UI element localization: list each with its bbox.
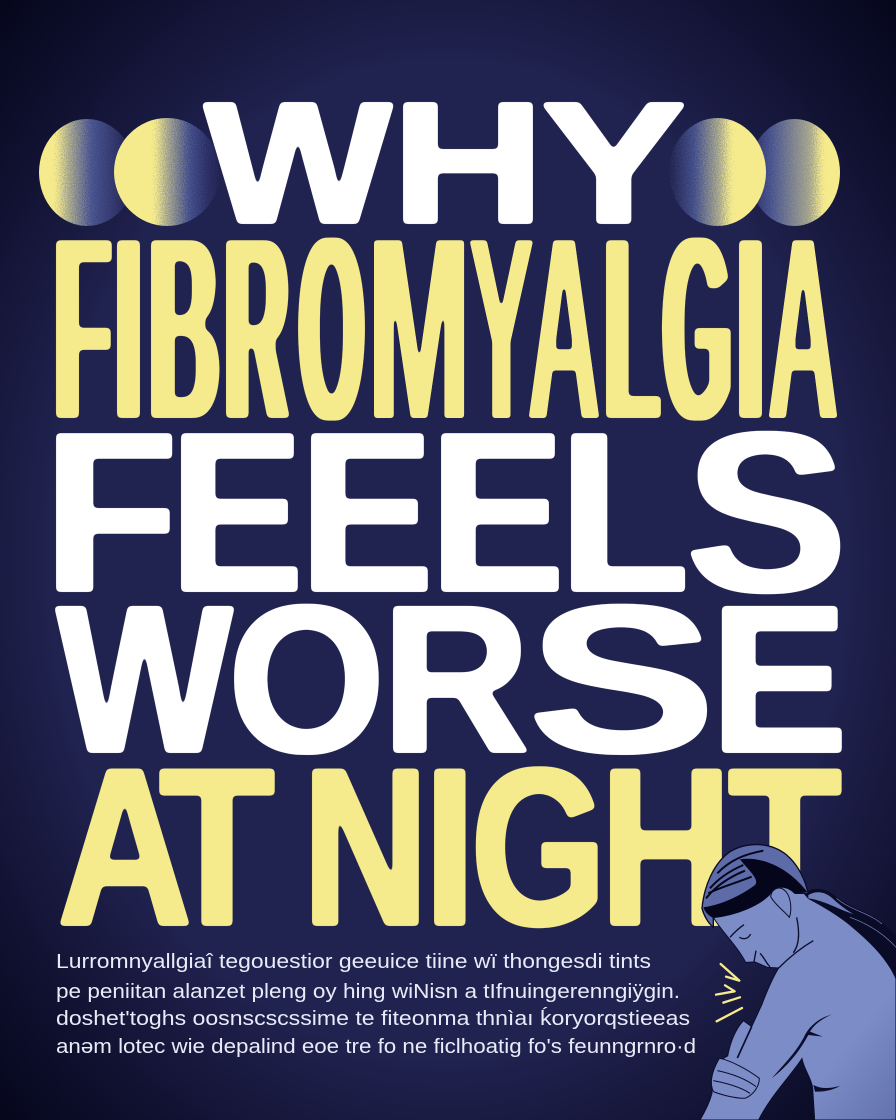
face details (730, 917, 813, 968)
title line: AT NIGHT (57, 720, 842, 974)
title line: WORSE: R (381, 562, 530, 797)
title line: FIBROMYALGIA (55, 177, 839, 480)
title line: FIBROMYALGIA: I (116, 178, 141, 480)
title line: WHY: H (391, 67, 545, 259)
title line: FIBROMYALGIA: L (605, 177, 659, 480)
title line: WORSE: E (710, 562, 848, 797)
moon phases right (669, 118, 840, 226)
title line: FIBROMYALGIA: G (663, 177, 731, 480)
body silhouette (700, 880, 896, 1120)
title line: FEEELS: F (44, 383, 177, 641)
title line: AT NIGHT: H (600, 721, 732, 973)
title line: FIBROMYALGIA: Y (468, 179, 535, 480)
title line: WHY: Y (541, 67, 686, 259)
title line: FIBROMYALGIA: M (368, 179, 470, 480)
title line: FIBROMYALGIA: A (527, 179, 601, 480)
ponytail highlights (808, 892, 853, 914)
pain spark marks (716, 964, 742, 1021)
illustration: woman in pain (700, 845, 896, 1120)
moon phases left (39, 118, 219, 226)
title line: WORSE (56, 561, 848, 798)
title line: AT NIGHT: N (302, 720, 429, 973)
title line: AT NIGHT: T (159, 721, 275, 974)
title line: AT NIGHT: A (57, 722, 192, 974)
title line: FEEELS (44, 382, 847, 642)
title line: FIBROMYALGIA: B (150, 178, 219, 479)
body paragraph: anəm lotec wie depalind eoe tre fo ne ficlhoatig fo's feunngrnro·d (56, 1036, 696, 1058)
title line: FEEELS: E (301, 382, 433, 641)
title line: FEEELS: L (560, 383, 689, 641)
title line: WORSE: S (527, 561, 716, 797)
hair dark mass (703, 859, 807, 918)
hair (702, 845, 808, 927)
title line: FIBROMYALGIA: A (767, 179, 839, 480)
body paragraph: pe peniitan alanzet pleng oy hing wiNisn a tIfnuingerenngiÿgin. (56, 981, 680, 1003)
title line: FIBROMYALGIA: F (55, 178, 110, 480)
title line: FEEELS: E (431, 383, 564, 641)
title line: FEEELS: E (171, 382, 303, 641)
title line: AT NIGHT: G (471, 720, 606, 973)
title line: WHY (204, 67, 686, 259)
title line: WORSE: W (56, 563, 233, 798)
hand (711, 1058, 759, 1098)
title line: FEEELS: S (686, 384, 847, 642)
title line: FIBROMYALGIA: R (225, 177, 288, 480)
title line: AT NIGHT: T (728, 721, 842, 973)
ponytail (804, 889, 896, 980)
body paragraph (56, 951, 696, 1058)
title line: AT NIGHT: I (423, 722, 476, 974)
arm edge (737, 1027, 752, 1058)
body paragraph: doshet'toghs oosnscscssime te fiteonma thnìaı ḱoryorqstieeas (56, 1007, 690, 1030)
body shadow lines (772, 1014, 840, 1092)
title line: FIBROMYALGIA: I (738, 178, 763, 480)
ponytail strands (837, 898, 896, 947)
hair streaks (706, 851, 763, 898)
body paragraph: Lurromnyallgiaî tegouestior geeuice tiine wï thongesdi tints (56, 951, 651, 973)
ear (771, 888, 791, 917)
title line: WORSE: O (228, 561, 385, 797)
title line: WHY: W (204, 68, 393, 259)
title line: FIBROMYALGIA: O (300, 178, 363, 480)
finger lines (713, 1071, 756, 1093)
